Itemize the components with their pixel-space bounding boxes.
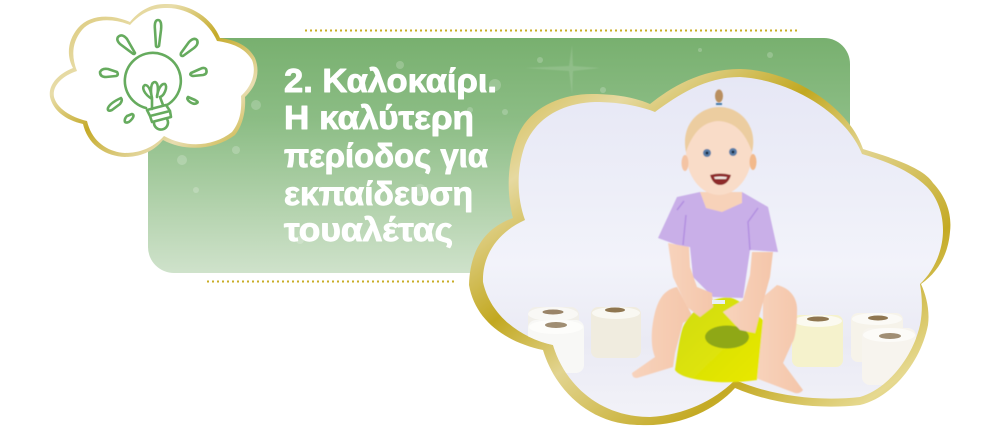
heading: τουαλέτας <box>284 211 453 248</box>
heading <box>284 62 497 248</box>
baby <box>632 90 803 393</box>
baby legs <box>632 287 693 378</box>
shirt <box>658 192 778 298</box>
photo cloud: baby on potty <box>469 69 950 425</box>
potty <box>675 297 763 382</box>
head <box>686 109 752 195</box>
icon: lightbulb <box>100 20 207 130</box>
heading: εκπαίδευση <box>284 175 473 212</box>
cloud gold border <box>469 69 950 425</box>
heading: περίοδος για <box>284 137 488 174</box>
arms <box>668 243 713 317</box>
heading: 2. Καλοκαίρι. <box>284 62 497 99</box>
idea cloud with lightbulb <box>50 4 258 157</box>
cloud photo area <box>483 77 943 417</box>
panel: green title background <box>148 38 850 273</box>
heading: Η καλύτερη <box>284 99 474 136</box>
cloud gold border <box>50 4 258 157</box>
toilet rolls <box>528 307 916 385</box>
